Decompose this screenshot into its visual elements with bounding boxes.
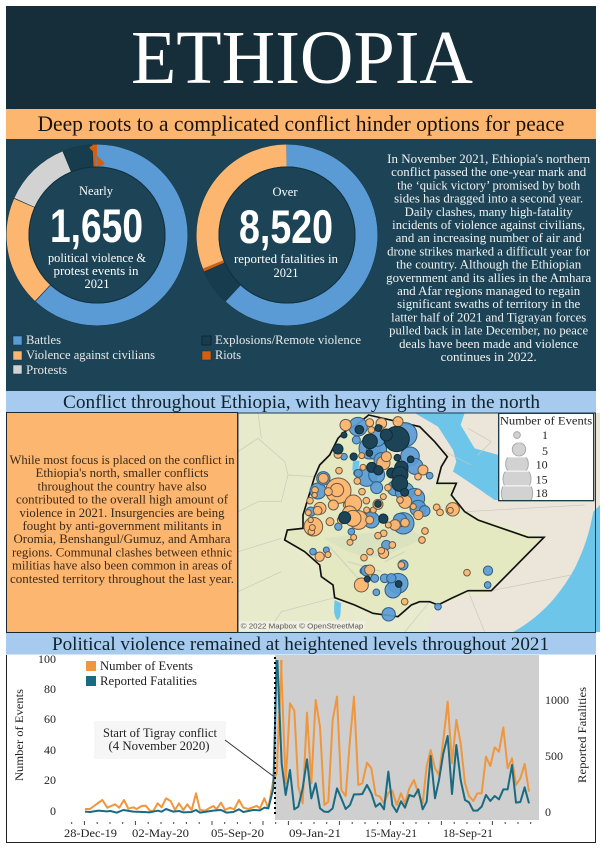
right axis <box>545 687 589 819</box>
annotation: start of Tigray conflict <box>94 721 273 776</box>
title banner: ETHIOPIA <box>131 16 473 100</box>
heading: deep roots: Deep roots to a complicated conflict hinder options for peace <box>38 111 564 136</box>
chart legend <box>86 659 197 688</box>
donut label: events: 2021 <box>84 277 110 291</box>
panel: map narrative: contributed to the overall high amount of <box>16 493 229 507</box>
map attribution: © 2022 Mapbox © OpenStreetMap <box>241 621 363 630</box>
map legend: number of events: 1 <box>542 428 548 442</box>
legend: event types: Riots <box>215 348 241 362</box>
left axis: 20 <box>44 773 56 787</box>
legend: event types: Protests <box>26 363 67 377</box>
donut label: fatalities: 2021 <box>274 266 298 280</box>
text block: overview paragraph: drone strikes marked a difficult year for <box>387 244 590 258</box>
text block: overview paragraph: sides has dragged into a second year. <box>394 192 583 206</box>
panel: map narrative: contested territory throughout the last year. <box>10 572 234 586</box>
left axis: 100 <box>38 652 56 666</box>
donut label: events <box>48 184 146 291</box>
date axis labels <box>64 826 493 840</box>
donut label: fatalities: 8,520 <box>239 200 333 253</box>
text block: overview paragraph: government and its allies in the Amhara <box>386 271 592 285</box>
date axis labels: 02-May-20 <box>132 826 189 840</box>
left axis: 0 <box>50 804 56 818</box>
donut: fatalities by type <box>196 144 378 326</box>
map legend: number of events <box>499 413 594 509</box>
annotation: start of Tigray conflict: (4 November 2020) <box>108 739 210 753</box>
text block: overview paragraph: conflict passed the one-year mark and <box>391 165 586 179</box>
panel: map narrative: violence in 2021. Insurgencies are being <box>20 506 224 520</box>
legend: event types <box>13 333 361 377</box>
annotation: start of Tigray conflict: Start of Tigray conflict <box>103 726 218 740</box>
panel: map narrative: While most focus is placed on the conflict in <box>10 453 234 467</box>
left axis <box>12 652 56 818</box>
shaded period since Tigray conflict <box>275 655 539 820</box>
text block: overview paragraph: pulled back in late December, no peace <box>389 324 588 338</box>
map legend: number of events: Number of Events <box>500 413 593 427</box>
dotted marker: start of conflict <box>274 657 276 817</box>
title banner <box>6 6 596 109</box>
text block: overview paragraph: the country. Although the Ethiopian <box>396 258 581 272</box>
legend: event types: Violence against civilians <box>26 348 155 362</box>
date axis labels: 09-Jan-21 <box>289 826 341 840</box>
text block: overview paragraph: latter half of 2021 and Tigrayan forces <box>391 310 586 324</box>
donut label: fatalities: reported fatalities in <box>234 252 339 266</box>
donut label: fatalities <box>234 185 339 280</box>
map: sea <box>415 413 505 500</box>
left axis: Number of Events <box>12 689 26 781</box>
date axis labels: 05-Sep-20 <box>211 826 264 840</box>
donut: events by type <box>6 144 188 326</box>
map: Ethiopia interior shading <box>285 415 544 617</box>
heading: conflict throughout Ethiopia: Conflict throughout Ethiopia, with heavy fighting in the north <box>63 393 540 413</box>
right axis: 500 <box>545 749 563 763</box>
donut label: fatalities: Over <box>272 185 298 199</box>
donut label: events: 1,650 <box>50 199 143 252</box>
map legend: number of events: 10 <box>536 457 548 471</box>
axis ticks <box>72 821 531 825</box>
panel: map narrative: throughout the country have also <box>38 479 206 493</box>
left axis: 80 <box>44 682 56 696</box>
map: events across Ethiopia <box>238 413 600 632</box>
text block: overview paragraph: continues in 2022. <box>441 350 537 364</box>
panel: map narrative <box>6 412 238 632</box>
text block: overview paragraph: the ‘quick victory’ promised by both <box>397 178 580 192</box>
heading: political violence: Political violence remained at heightened levels throughout 2021 <box>52 635 549 655</box>
map: Ethiopia border <box>285 415 544 617</box>
right axis: Reported Fatalities <box>575 687 589 783</box>
donut label: events: protest events in <box>54 264 139 278</box>
panel: map narrative: Ethiopia's north, smaller conflicts <box>36 466 209 480</box>
map legend: number of events: 5 <box>542 444 548 458</box>
map legend: number of events: 18 <box>536 486 548 500</box>
date axis labels: 15-May-21 <box>365 826 417 840</box>
text block: overview paragraph: and Afar regions managed to regain <box>397 284 580 298</box>
left axis: 40 <box>44 743 56 757</box>
chart legend: Reported Fatalities <box>100 674 197 688</box>
text block: overview paragraph: and an increasing number of air and <box>396 231 582 245</box>
panel: time series chart <box>6 652 596 842</box>
right axis: 1000 <box>545 693 569 707</box>
map legend: number of events: 15 <box>536 473 548 487</box>
text block: overview paragraph: deals have been made and violence <box>399 337 578 351</box>
date axis labels: 18-Sep-21 <box>443 826 493 840</box>
text block: overview paragraph: significant swaths of territory in the <box>397 297 580 311</box>
donut label: events: political violence & <box>48 251 146 265</box>
text block: overview paragraph: Daily clashes, many high-fatality <box>405 205 574 219</box>
text block: overview paragraph: In November 2021, Ethiopia's northern <box>387 152 590 166</box>
map: eastern land <box>405 413 600 632</box>
panel: map narrative: fought by anti-government militants in <box>22 519 222 533</box>
chart legend: Number of Events <box>100 659 193 673</box>
map frame <box>238 413 596 632</box>
map: country borders outside Ethiopia <box>238 413 585 632</box>
panel: map narrative: militias have also been common in areas of <box>12 559 233 573</box>
legend: event types: Explosions/Remote violence <box>215 333 361 347</box>
text block: overview paragraph: incidents of violence against civilians, <box>392 218 585 232</box>
panel: map narrative: regions. Communal clashes between ethnic <box>12 545 233 559</box>
line: number of events and fatalities <box>85 660 529 813</box>
date axis labels: 28-Dec-19 <box>64 826 117 840</box>
donut label: events: Nearly <box>79 184 114 198</box>
right axis: 0 <box>545 805 551 819</box>
text block: overview paragraph <box>386 152 592 364</box>
left axis: 60 <box>44 712 56 726</box>
legend: event types: Battles <box>26 333 61 347</box>
panel: map narrative: Oromia, Benshangul/Gumuz, and Amhara <box>14 532 231 546</box>
panel: overview <box>6 139 596 391</box>
map: event bubbles <box>304 417 493 621</box>
